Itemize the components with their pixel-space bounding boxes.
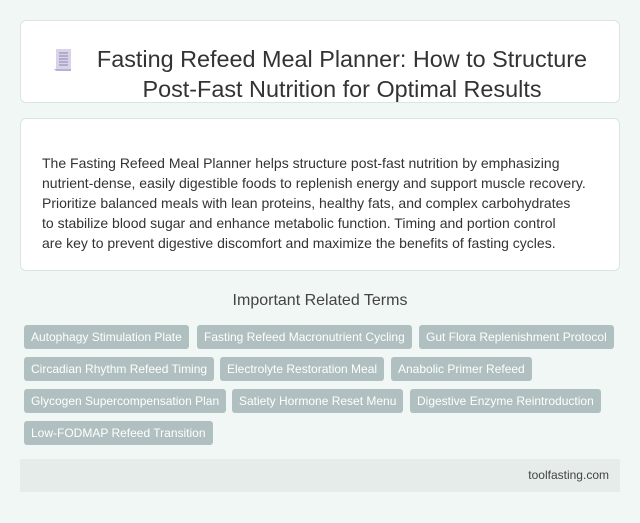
tags: Gut Flora Replenishment Protocol [426,330,607,344]
icon: document [54,49,71,71]
tags: Satiety Hormone Reset Menu [239,394,396,408]
summary text: The Fasting Refeed Meal Planner helps structure post-fast nutrition by emphasizing [42,155,560,171]
tags: Autophagy Stimulation Plate [31,330,182,344]
tags: Circadian Rhythm Refeed Timing [31,362,207,376]
footer [20,459,620,492]
summary text: nutrient-dense, easily digestible foods to replenish energy and support muscle recovery. [42,175,586,191]
header card [20,20,620,103]
tags: Fasting Refeed Macronutrient Cycling [204,330,405,344]
tags: Glycogen Supercompensation Plan [31,394,219,408]
summary text: Prioritize balanced meals with lean proteins, healthy fats, and complex carbohydrates [42,195,570,211]
tags: Low-FODMAP Refeed Transition [31,426,206,440]
summary text [20,118,620,271]
summary text: are key to prevent digestive discomfort and maximize the benefits of fasting cycles. [42,235,556,251]
title: Fasting Refeed Meal Planner: How to Structure Post-Fast Nutrition for Optimal Results [97,46,587,102]
tags: Digestive Enzyme Reintroduction [417,394,594,408]
footer: toolfasting.com [528,468,609,482]
tags: Anabolic Primer Refeed [398,362,525,376]
heading: related terms: Important Related Terms [233,292,407,309]
summary text: to stabilize blood sugar and enhance metabolic function. Timing and portion control [42,215,556,231]
tags: Electrolyte Restoration Meal [227,362,377,376]
